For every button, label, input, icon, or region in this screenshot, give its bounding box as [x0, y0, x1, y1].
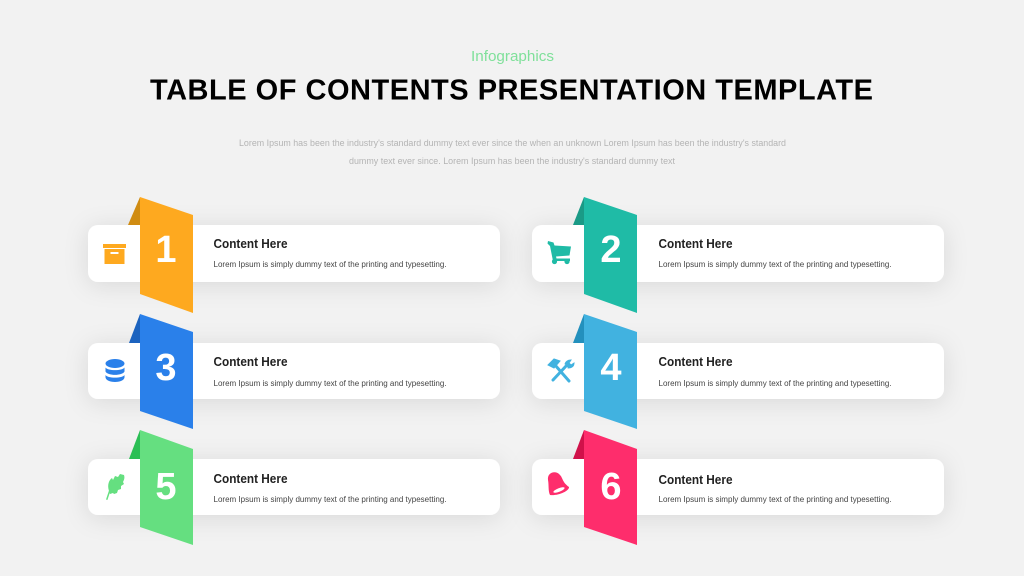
number 3: 3 [155, 347, 177, 389]
icon: database [106, 359, 124, 382]
icon: hammer and wrench [548, 359, 574, 381]
ribbon fold 3 [129, 314, 140, 343]
panel: item 6 [532, 430, 944, 545]
icon: feather leaf [106, 474, 124, 500]
number 5: 5 [155, 466, 177, 508]
text 5: Lorem Ipsum is simply dummy text of the printing and typesetting. [214, 495, 446, 504]
number 2: 2 [600, 229, 622, 271]
panel: item 4 [532, 314, 944, 429]
text 2: Lorem Ipsum is simply dummy text of the printing and typesetting. [658, 260, 892, 269]
ribbon 5 [140, 430, 193, 545]
ribbon fold 6 [573, 430, 584, 459]
panel: item 3 [88, 314, 500, 429]
heading 2: Content Here [658, 237, 733, 251]
text 1: Lorem Ipsum is simply dummy text of the printing and typesetting. [214, 260, 446, 269]
text 3: Lorem Ipsum is simply dummy text of the printing and typesetting. [214, 379, 446, 388]
intro paragraph: dummy text ever since. Lorem Ipsum has been the industry's standard dummy text [349, 156, 675, 166]
heading 3: Content Here [214, 355, 288, 369]
ribbon 4 [584, 314, 637, 429]
icon: archive box [103, 244, 126, 264]
number 1: 1 [155, 229, 177, 271]
heading 6: Content Here [658, 473, 733, 487]
heading 1: Content Here [214, 237, 288, 251]
text 4: Lorem Ipsum is simply dummy text of the printing and typesetting. [658, 379, 892, 388]
panel: item 1 [88, 197, 500, 313]
ribbon 1 [140, 197, 193, 313]
ribbon fold 5 [129, 430, 140, 459]
heading 5: Content Here [214, 472, 288, 486]
text 6: Lorem Ipsum is simply dummy text of the printing and typesetting. [658, 495, 892, 504]
icon: bell [548, 472, 569, 495]
panel: item 5 [88, 430, 500, 545]
ribbon fold 4 [573, 314, 584, 343]
number 6: 6 [600, 466, 622, 508]
icon: shopping cart [548, 241, 571, 264]
intro paragraph [239, 138, 786, 166]
ribbon fold 1 [128, 197, 140, 225]
eyebrow: Infographics: Infographics [471, 48, 554, 65]
panel: item 2 [532, 197, 944, 313]
title: TABLE OF CONTENTS PRESENTATION TEMPLATE [150, 74, 873, 106]
ribbon 2 [584, 197, 637, 313]
number 4: 4 [600, 347, 622, 389]
intro paragraph: Lorem Ipsum has been the industry's standard dummy text ever since the when an unknown Lorem Ipsum has been the industry's standard [239, 138, 786, 148]
heading 4: Content Here [658, 355, 733, 369]
ribbon 6 [584, 430, 637, 545]
ribbon fold 2 [573, 197, 584, 225]
ribbon 3 [140, 314, 193, 429]
